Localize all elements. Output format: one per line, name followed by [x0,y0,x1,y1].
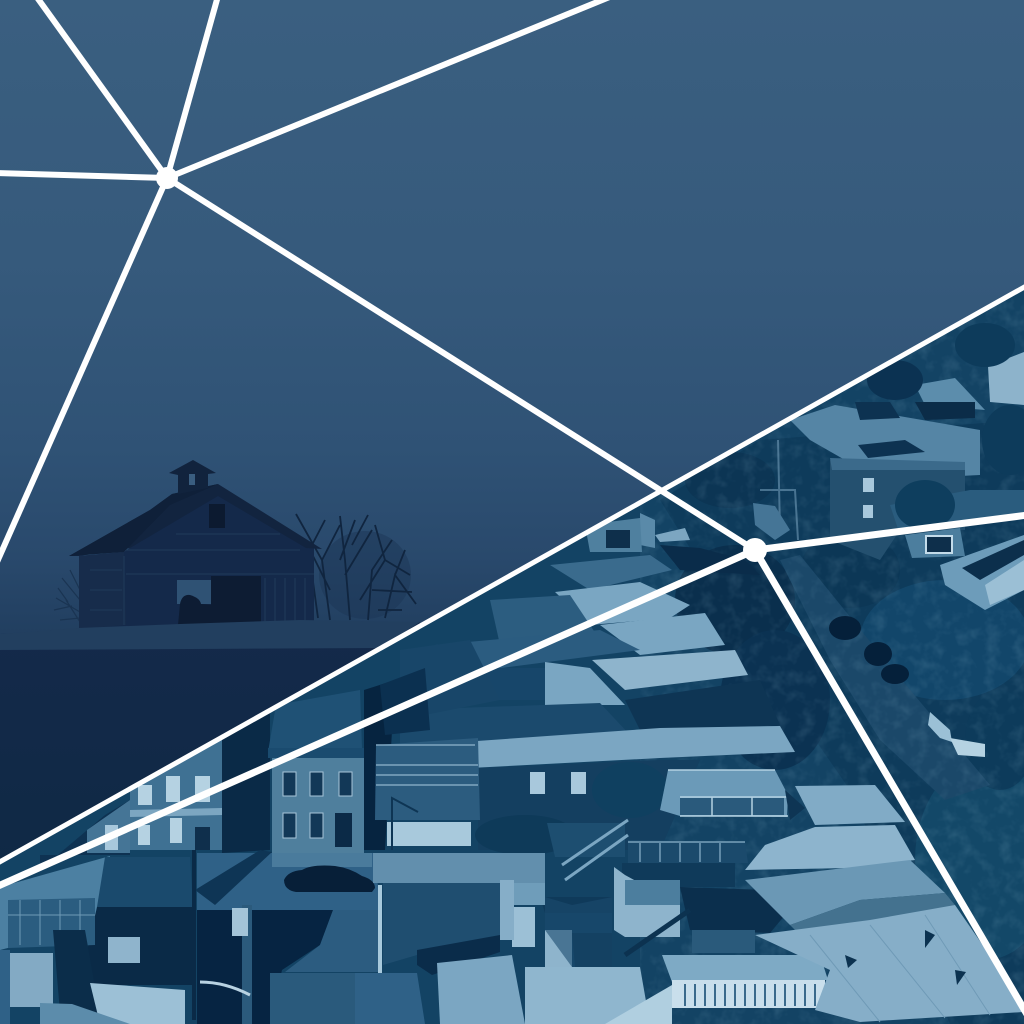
line: thin diagonal [0,285,1024,864]
dirt lot [383,883,500,965]
side house [500,880,514,940]
hub: upper left [156,167,178,189]
trees right side [660,420,1024,1024]
brick wall with windows [640,760,688,840]
bare tree right of barn [296,514,416,620]
rural scene: barn and trees [0,460,420,650]
parked cars [829,616,985,757]
street shadows [195,850,272,905]
line: upper left spokes [0,0,612,562]
barn roof [69,484,322,556]
upper right buildings [790,323,1024,610]
white annex [614,867,680,937]
barn body [79,486,314,628]
barn cupola [169,460,216,494]
utility pole [242,905,252,1024]
lower dark deck [622,863,735,887]
city photo panel [0,280,1024,1024]
large flat roofs [745,785,1024,1022]
grass [0,620,420,650]
line: link between hubs [167,178,755,550]
field [0,622,420,870]
city base [0,280,1024,1024]
small building by the node [753,503,790,540]
small tree behind barn [54,570,80,622]
lower deck cluster [545,897,612,967]
tree with pale trunks [760,440,798,540]
road [780,555,990,800]
garden beds [547,823,625,857]
barn left wing [79,552,126,629]
hub: lower right [743,538,767,562]
yard [285,910,380,972]
tree canopies [675,452,1024,960]
barn boards [90,534,314,625]
central rowhouse roofs [400,513,795,855]
sidewalk in front of house [272,853,372,867]
bottom deck [662,955,828,982]
left pale house [40,708,270,870]
light roof [373,853,545,883]
sky background [0,0,1024,640]
line: right spokes [755,515,1024,1016]
upper deck [628,840,722,856]
deck structures [512,770,855,1024]
barn door opening [177,580,211,604]
car [284,866,375,892]
tree texture [640,290,1024,1024]
line: thick diagonal to hub [0,550,755,887]
brick rowhouse [268,680,395,856]
mid deck and white garage [375,642,484,850]
gravel roof [692,930,755,953]
shadow under street [197,910,333,1024]
street [197,853,380,910]
dark deck and stairs [680,887,785,933]
bottom-left roofs [0,850,525,1024]
